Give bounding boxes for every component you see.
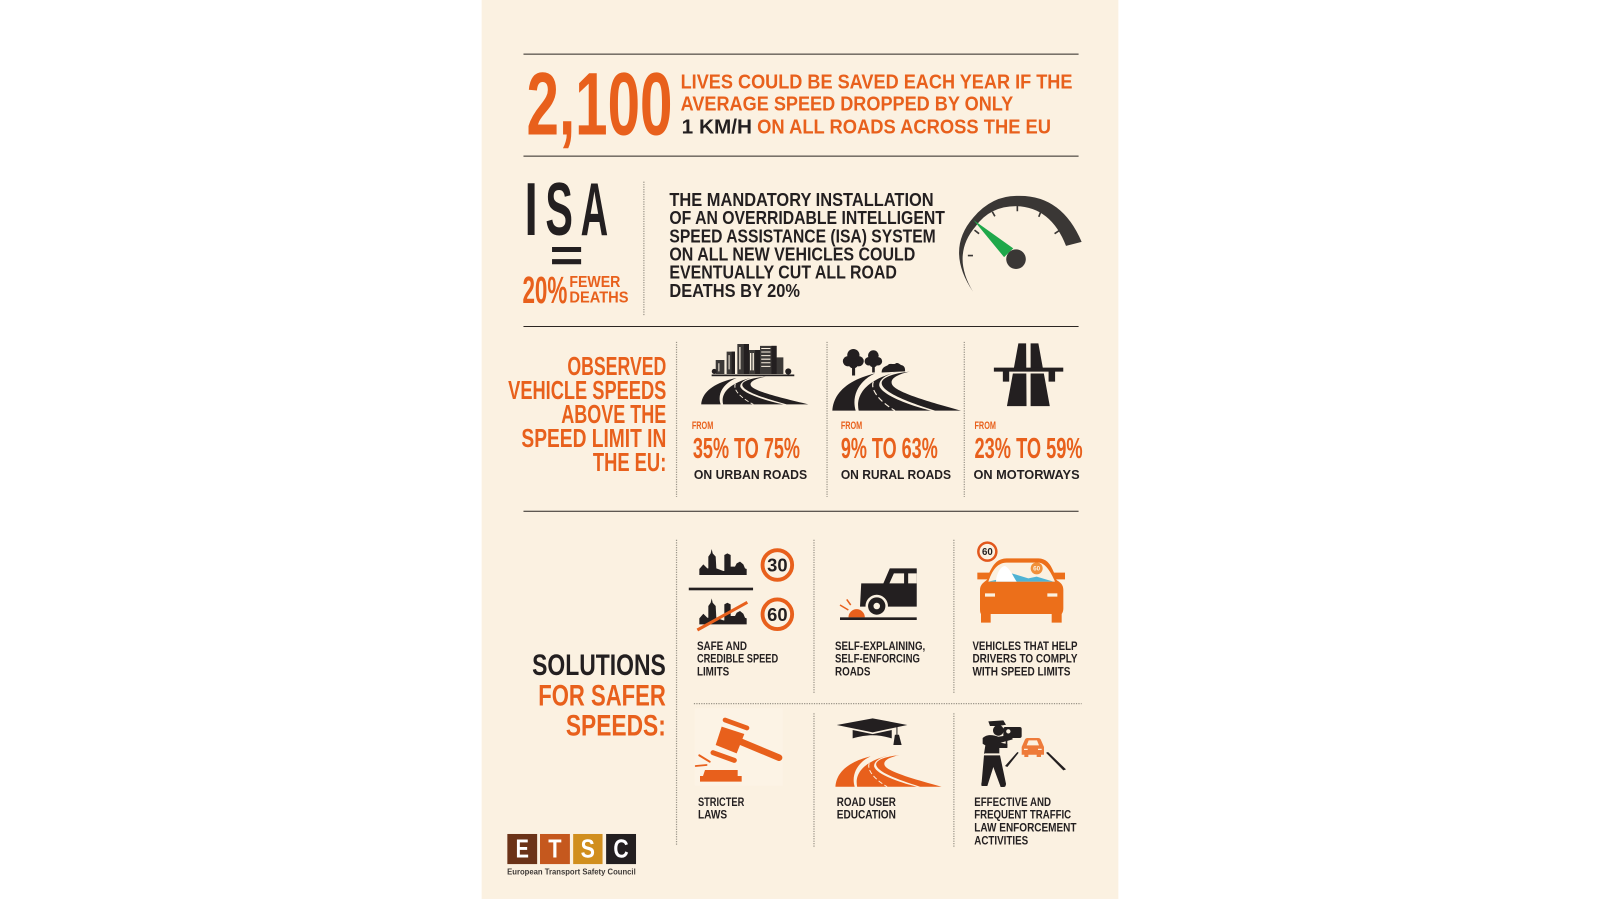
label bbox=[835, 640, 925, 678]
equals sign bbox=[552, 247, 581, 264]
solution: vehicles that help bbox=[972, 543, 1078, 678]
ISA equation bbox=[522, 168, 629, 311]
ISA description: SPEED ASSISTANCE (ISA) SYSTEM bbox=[669, 225, 936, 246]
icon: orange car with speed sign: 60 bbox=[1033, 566, 1041, 573]
ISA description bbox=[669, 189, 946, 301]
ISA description: DEATHS BY 20% bbox=[669, 280, 800, 301]
solutions heading: SOLUTIONS bbox=[532, 649, 666, 682]
icon: motorway bridge bbox=[994, 343, 1063, 406]
label bbox=[698, 796, 745, 822]
label: ROAD USER bbox=[837, 796, 896, 809]
icon: trees and road bbox=[832, 349, 961, 411]
ETSC logo: C bbox=[613, 836, 629, 864]
column: urban roads: 35% TO 75% bbox=[693, 433, 800, 465]
20% fewer deaths: FEWER bbox=[569, 274, 620, 291]
ETSC logo: European Transport Safety Council bbox=[507, 867, 636, 876]
panel: background bbox=[482, 0, 1118, 899]
column: motorways: 23% TO 59% bbox=[974, 433, 1083, 465]
statement text: 1 KM/H bbox=[682, 116, 752, 138]
observed speeds heading: OBSERVED bbox=[567, 353, 666, 381]
statistic: FROM bbox=[974, 420, 996, 432]
label bbox=[972, 640, 1078, 678]
column: motorways: ON MOTORWAYS bbox=[973, 467, 1080, 482]
ISA letters: I bbox=[524, 168, 538, 252]
headline stat bbox=[527, 55, 1072, 154]
solutions heading: SPEEDS: bbox=[566, 710, 666, 743]
ETSC logo: E bbox=[516, 836, 529, 864]
icon: car on speed bump bbox=[840, 568, 917, 620]
observed speeds heading: SPEED LIMIT IN bbox=[521, 425, 666, 453]
icon: skylines and speed signs: 30 bbox=[767, 555, 788, 576]
label: CREDIBLE SPEED bbox=[697, 653, 778, 666]
ISA description: OF AN OVERRIDABLE INTELLIGENT bbox=[669, 207, 946, 228]
label: VEHICLES THAT HELP bbox=[972, 640, 1078, 653]
solution: speed limits bbox=[689, 549, 792, 678]
label: SELF-EXPLAINING, bbox=[835, 640, 925, 653]
icon: city and road bbox=[701, 344, 808, 404]
ISA description: ON ALL NEW VEHICLES COULD bbox=[669, 244, 915, 265]
label: ROADS bbox=[835, 665, 871, 678]
solutions heading bbox=[532, 649, 666, 743]
icon: gavel bbox=[695, 708, 783, 786]
icon: orange car with speed sign bbox=[977, 543, 1065, 623]
ETSC logo bbox=[507, 834, 636, 876]
ETSC logo: S bbox=[581, 836, 595, 864]
label: WITH SPEED LIMITS bbox=[972, 665, 1071, 678]
column: rural roads: ON RURAL ROADS bbox=[841, 467, 951, 482]
solution: enforcement bbox=[974, 720, 1077, 847]
statistic: FROM bbox=[692, 420, 713, 432]
column: motorways bbox=[973, 343, 1083, 482]
big number: 2,100 bbox=[527, 55, 672, 154]
label: EDUCATION bbox=[837, 809, 896, 822]
statement text: ON ALL ROADS ACROSS THE EU bbox=[757, 116, 1051, 138]
icon: orange car with speed sign: 60 bbox=[982, 547, 993, 558]
observed speeds heading: THE EU: bbox=[593, 449, 666, 477]
column: urban roads: ON URBAN ROADS bbox=[694, 467, 807, 482]
column: urban roads bbox=[692, 344, 808, 482]
label: LIMITS bbox=[697, 665, 729, 678]
solution: education bbox=[835, 718, 942, 822]
label: STRICTER bbox=[698, 796, 745, 809]
column: rural roads: 9% TO 63% bbox=[841, 433, 938, 465]
label bbox=[974, 796, 1077, 847]
ISA description: THE MANDATORY INSTALLATION bbox=[669, 189, 934, 210]
ETSC logo: T bbox=[548, 836, 562, 864]
icon: graduation cap and road bbox=[835, 718, 942, 787]
solution: self-enforcing roads bbox=[835, 568, 925, 678]
statement text: LIVES COULD BE SAVED EACH YEAR IF THE bbox=[681, 71, 1072, 93]
icon: skylines and speed signs bbox=[689, 549, 792, 630]
statement text bbox=[681, 71, 1072, 138]
statement text: AVERAGE SPEED DROPPED BY ONLY bbox=[681, 94, 1014, 116]
icon: officer with speed camera bbox=[981, 720, 1066, 787]
label: FREQUENT TRAFFIC bbox=[974, 809, 1072, 822]
label: SAFE AND bbox=[697, 640, 747, 653]
label: DRIVERS TO COMPLY bbox=[972, 653, 1078, 666]
label bbox=[837, 796, 896, 822]
statistic: FROM bbox=[841, 420, 862, 432]
label: LAWS bbox=[698, 809, 727, 822]
observed speeds heading bbox=[508, 353, 666, 477]
label bbox=[697, 640, 778, 678]
label: SELF-ENFORCING bbox=[835, 653, 920, 666]
ISA letters: S bbox=[545, 168, 573, 252]
observed speeds heading: VEHICLE SPEEDS bbox=[508, 377, 666, 405]
label: ACTIVITIES bbox=[974, 834, 1028, 847]
20% fewer deaths: 20% bbox=[522, 269, 567, 311]
ISA description: EVENTUALLY CUT ALL ROAD bbox=[669, 262, 897, 283]
solutions heading: FOR SAFER bbox=[538, 680, 666, 713]
icon: speedometer bbox=[959, 196, 1082, 292]
20% fewer deaths: DEATHS bbox=[569, 290, 629, 307]
column: rural roads bbox=[832, 349, 961, 482]
label: LAW ENFORCEMENT bbox=[974, 821, 1077, 834]
solution: stricter laws bbox=[695, 708, 783, 822]
icon: skylines and speed signs: 60 bbox=[767, 604, 788, 625]
ISA letters: A bbox=[581, 168, 608, 252]
ISA letters bbox=[524, 168, 608, 252]
observed speeds heading: ABOVE THE bbox=[561, 401, 666, 429]
label: EFFECTIVE AND bbox=[974, 796, 1051, 809]
